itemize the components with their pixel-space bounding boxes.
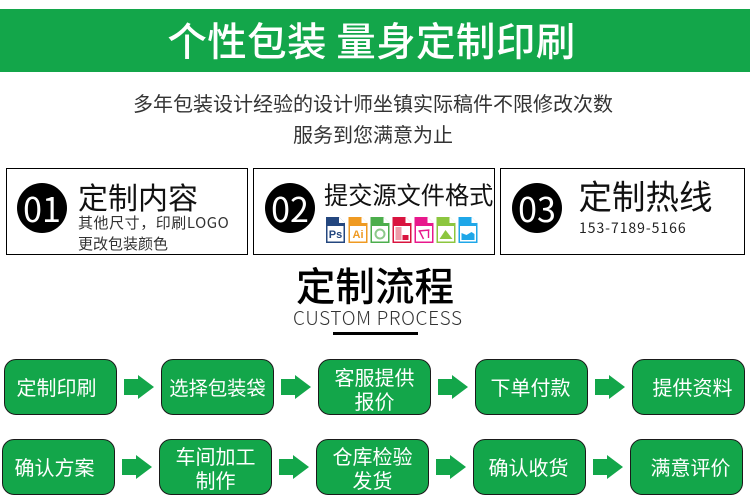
- arrow 4: [595, 375, 625, 399]
- icon: AI file: [348, 217, 368, 243]
- panel: customization content: [6, 168, 248, 255]
- arrow 3: [438, 375, 468, 399]
- card 2 heading: 提交源文件格式: [324, 176, 493, 211]
- step 3: 客服提供: [334, 362, 414, 390]
- step 8: [316, 439, 429, 495]
- title banner: [0, 9, 750, 72]
- icon: AI file: Ai: [352, 229, 364, 241]
- panel: source file formats: [253, 168, 495, 255]
- step 5: [632, 359, 745, 415]
- step 5: 提供资料: [652, 372, 732, 401]
- step 2: 选择包装袋: [169, 373, 266, 401]
- step 3: [318, 359, 431, 415]
- section heading: 定制流程: [296, 256, 454, 313]
- step 10: [630, 439, 743, 495]
- card border 1: [6, 168, 248, 255]
- step 8: 发货: [352, 465, 392, 494]
- icon: PS file: [326, 217, 345, 243]
- step 4: [475, 359, 588, 415]
- icon: CDR file: [370, 217, 390, 243]
- icon: PS file: Ps: [329, 229, 342, 241]
- card 1 heading: 定制内容: [78, 174, 198, 218]
- step 6: [2, 439, 115, 495]
- arrow 2: [281, 375, 311, 399]
- arrow 7: [436, 455, 466, 479]
- icon row: file formats: [326, 217, 478, 243]
- arrow 6: [279, 455, 309, 479]
- step 6: 确认方案: [14, 452, 94, 481]
- card border 3: [500, 168, 745, 255]
- number badge 01: 01: [23, 183, 61, 232]
- step 1: [4, 359, 117, 415]
- title banner: 个性包装 量身定制印刷: [167, 11, 576, 68]
- step 2: [161, 359, 274, 415]
- step 7: 制作: [196, 465, 236, 494]
- arrow 1: [124, 375, 154, 399]
- step 7: 车间加工: [176, 441, 256, 470]
- section subheading: CUSTOM PROCESS: [293, 304, 463, 331]
- step 9: 确认收货: [488, 452, 568, 481]
- panel: hotline: [500, 168, 745, 255]
- step 3: 报价: [354, 386, 394, 414]
- arrow 5: [122, 455, 152, 479]
- step 7: [159, 439, 272, 495]
- step 4: 下单付款: [490, 372, 570, 401]
- icon: PNG file: [458, 217, 478, 243]
- card 3 heading: 定制热线: [578, 170, 712, 219]
- subtitle line 1: 多年包装设计经验的设计师坐镇实际稿件不限修改次数: [133, 88, 613, 117]
- subtitle line 2: 服务到您满意为止: [293, 119, 453, 148]
- card 1 description line 2: 更改包装颜色: [78, 233, 168, 254]
- arrow 8: [593, 455, 623, 479]
- step 10: 满意评价: [650, 452, 730, 481]
- number badge 02: 02: [271, 183, 309, 232]
- icon: INDD file: [392, 217, 412, 243]
- hotline number: 153-7189-5166: [579, 218, 687, 238]
- step 8: 仓库检验: [332, 441, 412, 470]
- icon: JPG file: [436, 217, 456, 243]
- icon: EPS file: [414, 217, 434, 243]
- number badge 03: 03: [518, 183, 556, 232]
- card border 2: [253, 168, 495, 255]
- step 1: 定制印刷: [16, 372, 96, 401]
- step 9: [473, 439, 586, 495]
- heading underline: [333, 332, 418, 335]
- card 1 description line 1: 其他尺寸，印刷LOGO: [78, 212, 229, 233]
